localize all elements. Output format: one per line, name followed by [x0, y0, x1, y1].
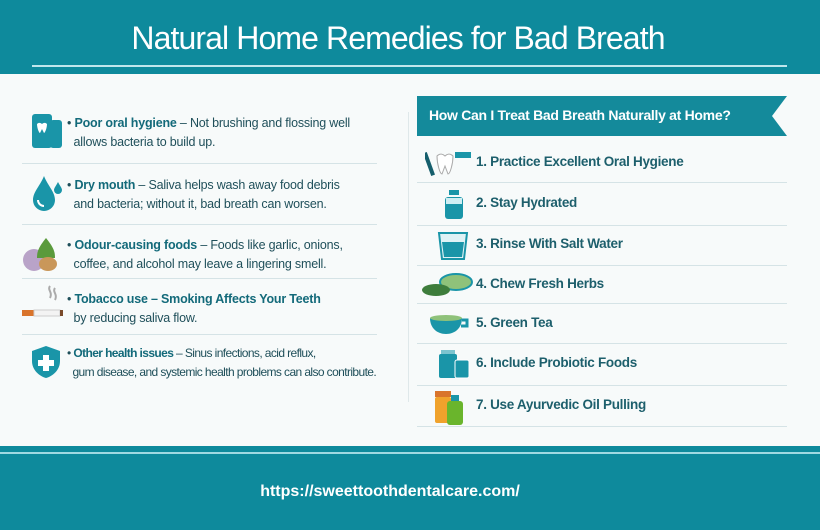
icon: jars: [439, 350, 468, 378]
cause: poor oral hygiene: allows bacteria to build up.: [74, 135, 215, 149]
banner: treatment heading: How Can I Treat Bad Breath Naturally at Home?: [429, 107, 731, 123]
cause: other health issues: gum disease, and systemic health problems can also contribute.: [72, 365, 376, 379]
icon: water drop: [33, 176, 62, 211]
panel: causes: [32, 114, 62, 148]
cause: poor oral hygiene: • Poor oral hygiene – Not brushing and flossing well: [67, 116, 350, 130]
icon: glass: [438, 232, 468, 260]
cause: dry mouth: • Dry mouth – Saliva helps wash away food debris: [67, 178, 340, 192]
item 4: 4. Chew Fresh Herbs: [476, 276, 604, 291]
icon: shield: [32, 346, 60, 378]
footer url: https://sweettoothdentalcare.com/: [260, 483, 520, 500]
cause: tobacco use: [67, 292, 321, 325]
cause: dry mouth: [67, 178, 340, 211]
icon: garlic onion: [23, 238, 57, 271]
cause: tobacco use: by reducing saliva flow.: [74, 311, 197, 325]
cause: other health issues: [67, 346, 376, 379]
cause: other health issues: • Other health issues – Sinus infections, acid reflux,: [67, 346, 316, 360]
item 1: 1. Practice Excellent Oral Hygiene: [476, 154, 683, 169]
icon: toothpaste: [32, 114, 62, 148]
cause: poor oral hygiene: [67, 116, 350, 149]
footer band: [0, 446, 820, 530]
cause: odour-causing foods: coffee, and alcohol may leave a lingering smell.: [74, 257, 326, 271]
item 7: 7. Use Ayurvedic Oil Pulling: [476, 397, 646, 412]
banner: treatment heading: [417, 96, 787, 136]
cause: tobacco use: • Tobacco use – Smoking Affects Your Teeth: [67, 292, 321, 306]
icon: herbs bowl: [422, 273, 473, 296]
title: Natural Home Remedies for Bad Breath: [131, 20, 665, 56]
item 3: 3. Rinse With Salt Water: [476, 236, 623, 251]
cause: dry mouth: and bacteria; without it, bad breath can worsen.: [74, 197, 327, 211]
cause: odour-causing foods: • Odour-causing foods – Foods like garlic, onions,: [67, 238, 343, 252]
icon: cigarette: [22, 286, 63, 316]
item 5: 5. Green Tea: [476, 315, 552, 330]
header band: [0, 0, 820, 74]
item 2: 2. Stay Hydrated: [476, 195, 577, 210]
icon: bottle: [445, 190, 463, 219]
icon: oil bottles: [435, 391, 463, 425]
icon: teacup: [430, 315, 468, 334]
cause: odour-causing foods: [67, 238, 343, 271]
icon: toothbrush tooth: [425, 152, 471, 176]
item 6: 6. Include Probiotic Foods: [476, 355, 637, 370]
